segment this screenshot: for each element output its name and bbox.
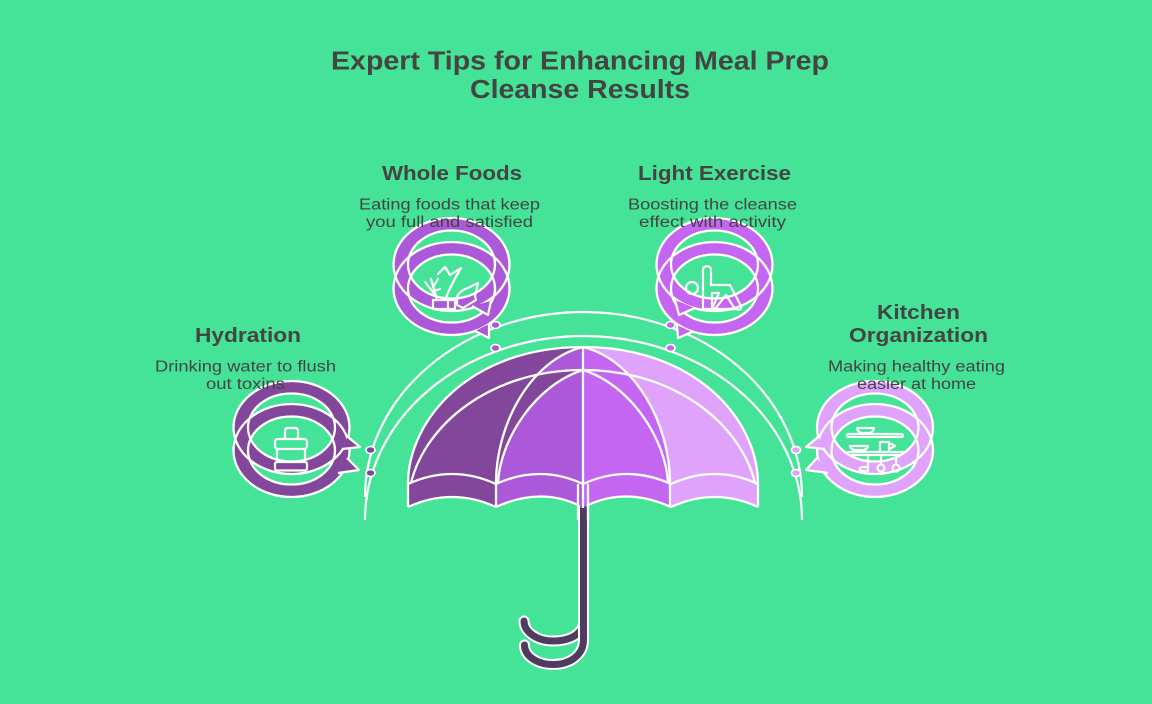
text: kitchen organization description [828, 358, 1005, 393]
umbrella canopy [408, 347, 758, 520]
text: whole foods description [359, 196, 540, 231]
panel: dark left [408, 347, 583, 484]
outer canopy arcs [365, 312, 802, 520]
icon: kitchen shelves [847, 428, 903, 472]
scallop bands [408, 474, 758, 507]
heading: kitchen organization: Organization [849, 325, 988, 347]
panel: mid left main [498, 370, 583, 484]
text: hydration description: out toxins [206, 376, 285, 393]
speech tails: kitchen organization [806, 437, 828, 473]
title [331, 48, 829, 104]
text: kitchen organization description: easier at home [857, 376, 976, 393]
ring: light exercise [656, 218, 772, 335]
icon: plant and leaf [425, 267, 478, 309]
text: light exercise description: effect with activity [639, 214, 786, 231]
text: light exercise description: Boosting the cleanse [628, 196, 797, 214]
text: kitchen organization description: Making healthy eating [828, 358, 1005, 376]
text: hydration description [155, 358, 336, 393]
ring: kitchen organization [817, 381, 933, 497]
text: whole foods description: Eating foods that keep [359, 196, 540, 214]
title: Cleanse Results [470, 76, 690, 104]
heading: hydration: Hydration [195, 325, 301, 347]
text: whole foods description: you full and satisfied [366, 214, 533, 231]
heading: whole foods: Whole Foods [382, 163, 522, 185]
speech tails: whole foods [472, 301, 491, 338]
text: hydration description: Drinking water to flush [155, 358, 336, 376]
heading: light exercise: Light Exercise [638, 163, 791, 185]
heading: kitchen organization: Kitchen [877, 302, 960, 324]
umbrella handle [524, 508, 584, 664]
connector dots [366, 322, 800, 476]
text: light exercise description [628, 196, 797, 231]
speech tails: hydration [338, 437, 360, 473]
heading: kitchen organization [849, 302, 988, 347]
speech tails: light exercise [675, 300, 695, 338]
canopy outlines [408, 347, 758, 520]
panel: light right [583, 347, 758, 484]
title: Expert Tips for Enhancing Meal Prep [331, 48, 829, 76]
panel: mid left top [535, 347, 583, 376]
panel: mid right [583, 347, 670, 484]
ring: hydration [234, 381, 350, 497]
ring: whole foods [394, 218, 510, 335]
icon: water bottle [275, 428, 307, 470]
icon: seated exercise [686, 266, 741, 310]
